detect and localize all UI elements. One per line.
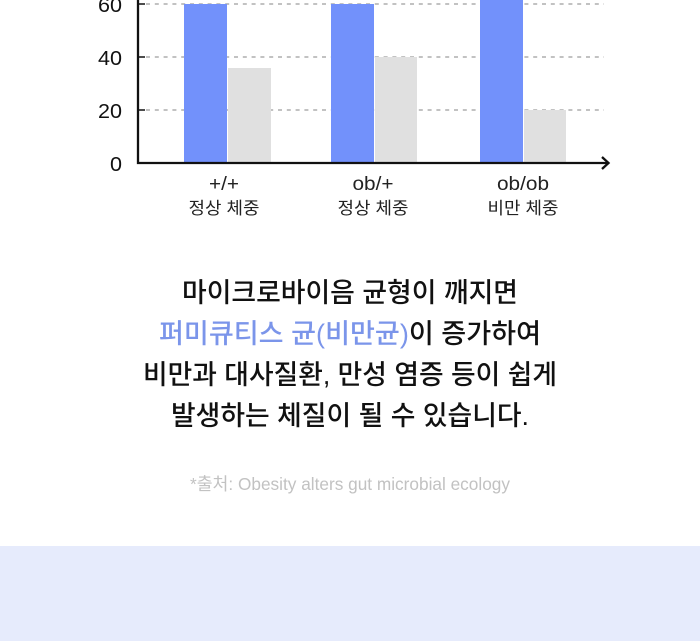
main message text: 마이크로바이음 균형이 깨지면: [182, 278, 518, 308]
x-axis sublabels: [188, 199, 558, 218]
main message text: 발생하는 체질이 될 수 있습니다.: [171, 401, 529, 431]
y-axis labels: [98, 0, 122, 176]
bottom band: [0, 546, 700, 641]
y-axis labels: 40: [98, 47, 122, 70]
bar chart: [98, 0, 608, 218]
group ob/ob bars: [480, 0, 566, 163]
group +/+ bars: [184, 4, 271, 163]
main message text: 퍼미큐티스 균(비만균)이 증가하여: [159, 319, 541, 349]
x-axis labels: ob/ob: [497, 174, 549, 195]
y-axis labels: 20: [98, 100, 122, 123]
chart axes: [138, 0, 608, 169]
x-axis sublabels: 비만 체중: [488, 199, 558, 218]
x-axis labels: [209, 174, 549, 195]
y-axis labels: 0: [110, 153, 122, 176]
source note: *출처: Obesity alters gut microbial ecology: [190, 474, 510, 494]
main message text: [143, 278, 557, 431]
group ob/+ bars: [331, 4, 417, 163]
main message text: 비만과 대사질환, 만성 염증 등이 쉽게: [143, 360, 557, 390]
x-axis sublabels: 정상 체중: [338, 199, 408, 218]
x-axis labels: ob/+: [352, 174, 394, 195]
x-axis sublabels: 정상 체중: [188, 199, 260, 218]
x-axis labels: +/+: [209, 174, 239, 195]
